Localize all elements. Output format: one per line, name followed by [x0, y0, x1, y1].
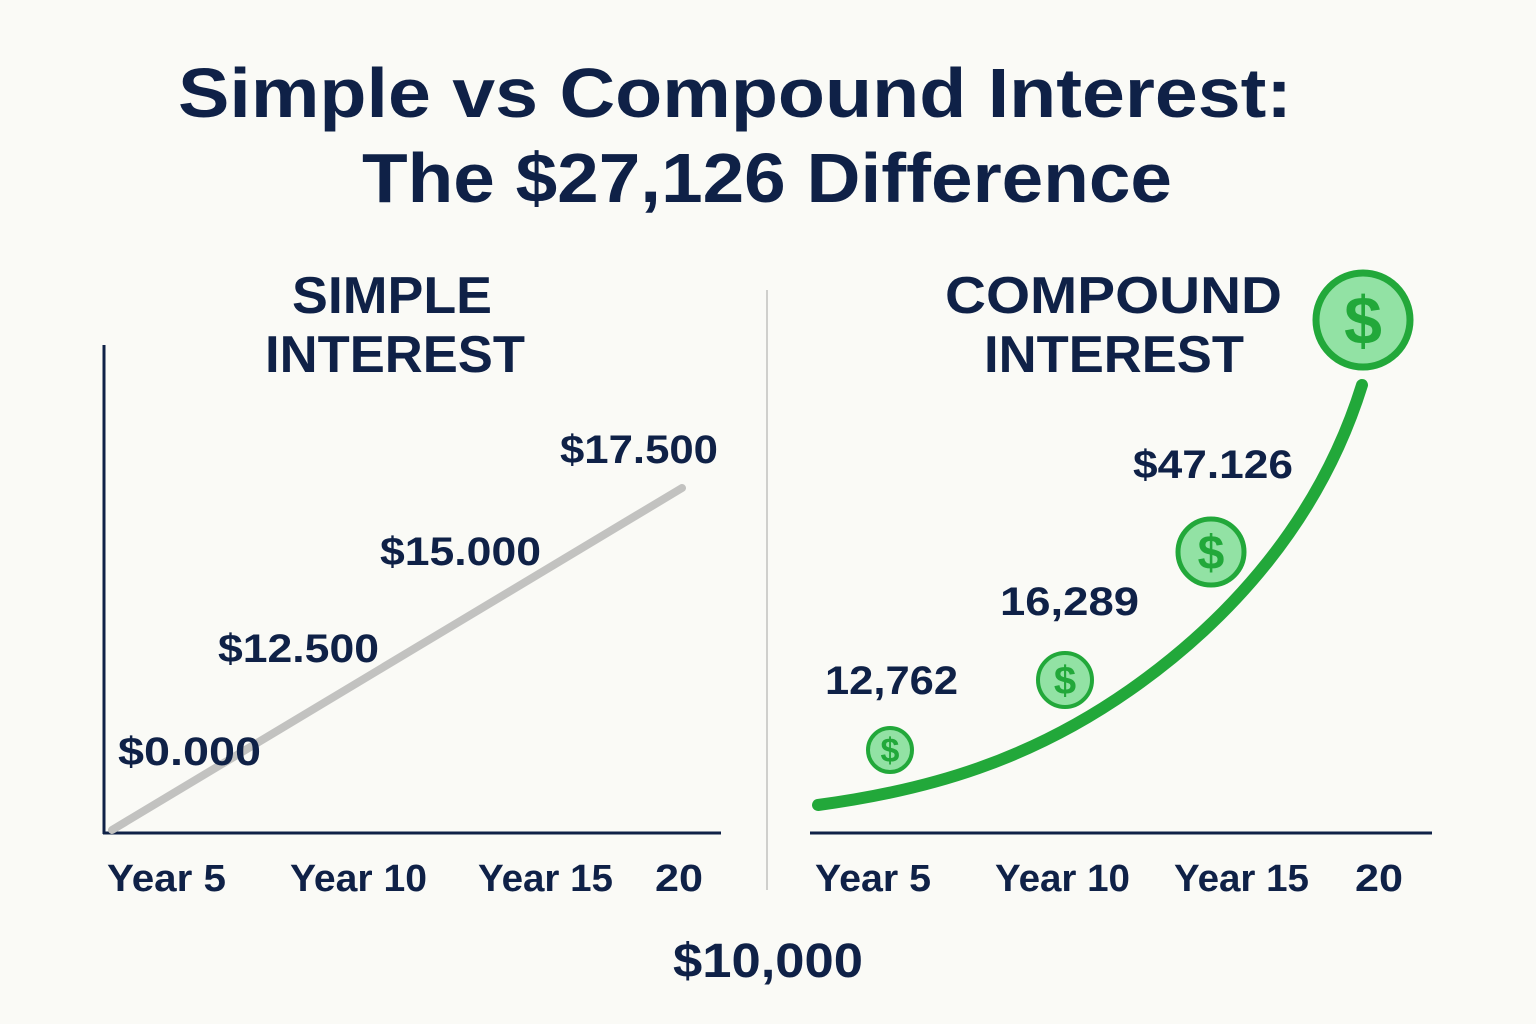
- heading: simple interest: INTEREST: [265, 326, 525, 384]
- value labels: compound: [825, 443, 1293, 703]
- x labels: simple: Year 5: [107, 858, 226, 900]
- line chart: simple: [112, 488, 682, 830]
- heading: compound interest: COMPOUND: [945, 267, 1282, 325]
- footer: principal: $10,000: [673, 935, 863, 988]
- x labels: simple: [107, 858, 703, 900]
- icons: coins: $: [881, 732, 900, 770]
- x labels: simple: Year 10: [290, 858, 427, 900]
- title: The $27,126 Difference: [362, 139, 1172, 217]
- heading: compound interest: INTEREST: [984, 326, 1244, 384]
- value labels: compound: 16,289: [1000, 580, 1139, 624]
- x labels: compound: [815, 858, 1403, 900]
- value labels: simple: $0.000: [118, 730, 261, 774]
- x labels: compound: Year 5: [815, 858, 931, 900]
- x labels: simple: Year 15: [478, 858, 613, 900]
- value labels: simple: $15.000: [380, 530, 541, 574]
- x labels: compound: Year 10: [995, 858, 1130, 900]
- x labels: simple: 20: [655, 858, 703, 900]
- value labels: compound: 12,762: [825, 659, 958, 703]
- icons: coins: $: [1344, 283, 1382, 359]
- title: [178, 54, 1292, 217]
- axis: compound: [810, 832, 1432, 834]
- axes: simple: [103, 345, 721, 834]
- panel: simple interest: [103, 267, 721, 900]
- x labels: compound: Year 15: [1174, 858, 1309, 900]
- curve: compound: [818, 385, 1362, 805]
- value labels: simple: [118, 428, 718, 774]
- title: Simple vs Compound Interest:: [178, 54, 1292, 132]
- heading: simple interest: SIMPLE: [292, 267, 492, 325]
- value labels: compound: $47.126: [1133, 443, 1293, 487]
- icons: coins: $: [1198, 527, 1225, 580]
- heading: compound interest: [945, 267, 1282, 384]
- value labels: simple: $17.500: [560, 428, 718, 472]
- panel: compound interest: [810, 267, 1432, 900]
- x labels: compound: 20: [1355, 858, 1403, 900]
- icons: coins: $: [1054, 659, 1076, 703]
- heading: simple interest: [265, 267, 525, 384]
- value labels: simple: $12.500: [218, 627, 379, 671]
- icons: coins: [868, 273, 1410, 772]
